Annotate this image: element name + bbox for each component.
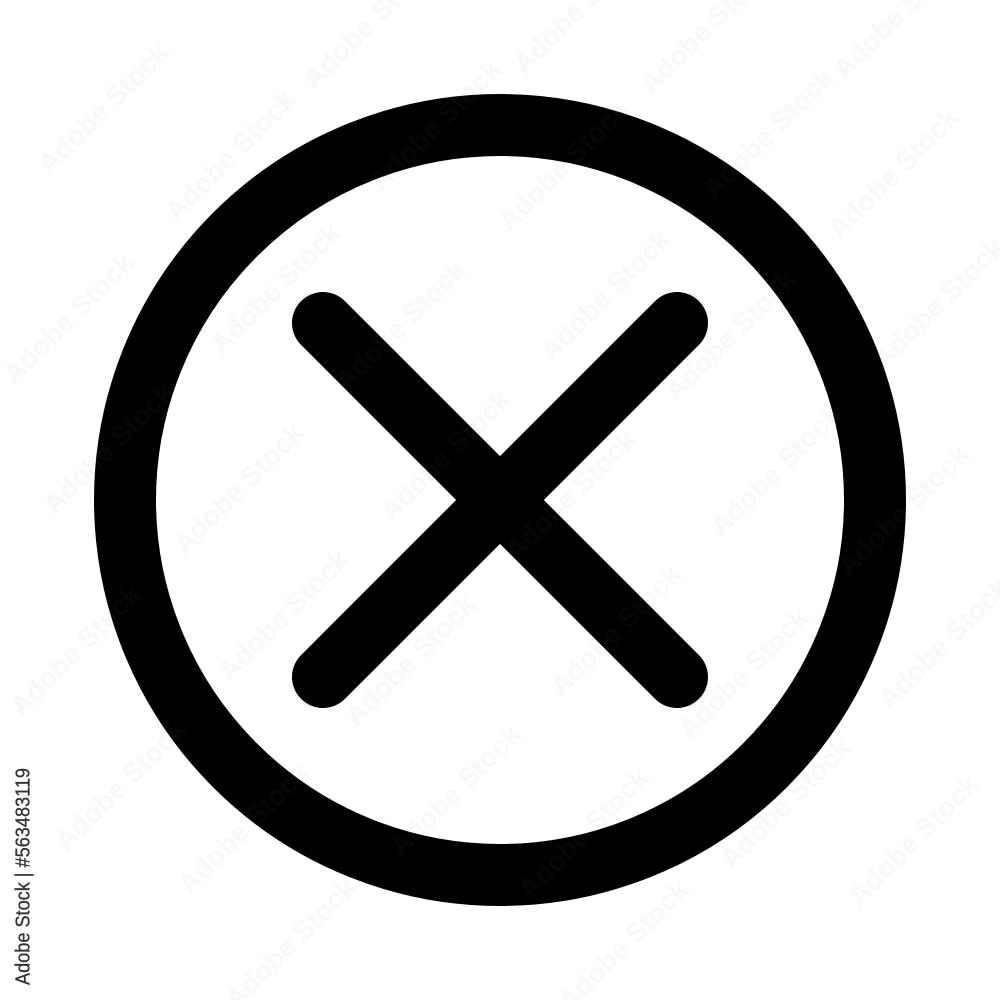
faint repeating watermark: Adobe Stock bbox=[329, 254, 472, 397]
faint repeating watermark: Adobe Stock bbox=[339, 589, 482, 732]
faint repeating watermark: Adobe Stock bbox=[822, 102, 965, 245]
faint repeating watermark: Adobe Stock bbox=[159, 84, 302, 227]
faint repeating watermark: Adobe Stock bbox=[364, 54, 507, 197]
faint repeating watermark: Adobe Stock bbox=[534, 224, 677, 367]
faint repeating watermark: Adobe Stock bbox=[672, 602, 815, 745]
faint repeating watermark: Adobe Stock bbox=[704, 399, 847, 542]
faint repeating watermark: Adobe Stock bbox=[384, 719, 527, 862]
faint repeating watermark: Adobe Stock bbox=[167, 417, 310, 560]
vertical stock credit text: Adobe Stock | #563483119 bbox=[12, 768, 34, 985]
faint repeating watermark: Adobe Stock bbox=[544, 559, 687, 702]
faint repeating watermark: Adobe Stock bbox=[204, 217, 347, 360]
faint repeating watermark: Adobe Stock bbox=[659, 264, 802, 407]
faint repeating watermark: Adobe Stock bbox=[0, 247, 140, 390]
icon: X mark bbox=[323, 323, 677, 677]
faint repeating watermark: Adobe Stock bbox=[37, 377, 180, 520]
faint repeating watermark: Adobe Stock bbox=[49, 714, 192, 857]
faint repeating watermark: Adobe Stock bbox=[832, 439, 975, 582]
faint repeating watermark: Adobe Stock bbox=[697, 62, 840, 205]
faint repeating watermark: Adobe Stock bbox=[492, 94, 635, 237]
faint repeating watermark: Adobe Stock bbox=[499, 424, 642, 567]
faint repeating watermark: Adobe Stock bbox=[714, 732, 857, 875]
faint repeating watermark: Adobe Stock bbox=[374, 384, 517, 527]
faint repeating watermark: Adobe Stock bbox=[172, 757, 315, 900]
faint repeating watermark: Adobe Stock bbox=[4, 579, 147, 722]
faint repeating watermark: Adobe Stock bbox=[32, 37, 175, 180]
faint repeating watermark: Adobe Stock bbox=[212, 544, 355, 687]
icon ring bbox=[125, 125, 875, 875]
faint repeating watermark: Adobe Stock bbox=[842, 769, 985, 912]
icon: circled X bbox=[125, 125, 875, 875]
faint repeating watermark: Adobe Stock bbox=[512, 762, 655, 905]
